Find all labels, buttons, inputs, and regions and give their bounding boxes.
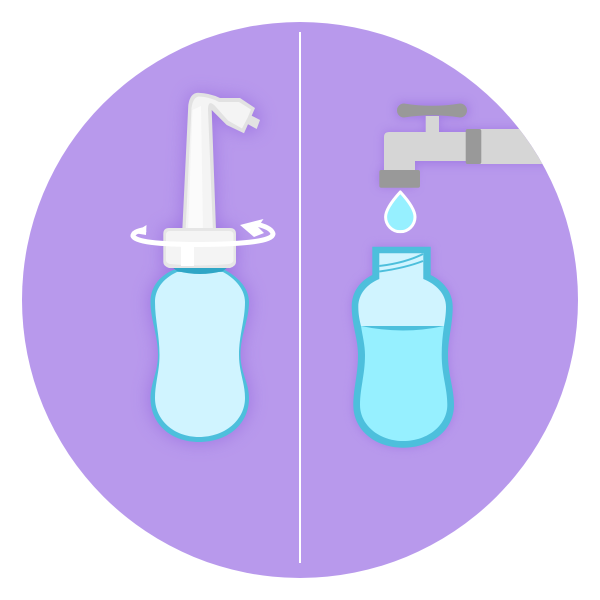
right arrow head (240, 219, 264, 237)
bottle interior (155, 272, 245, 437)
nozzle spout (182, 93, 260, 230)
nozzle cap (163, 228, 236, 268)
water surface (361, 326, 444, 330)
bottle shadow (352, 247, 454, 448)
spout highlight (186, 96, 251, 232)
water (360, 326, 447, 441)
water-filled bottle (352, 247, 454, 448)
faucet shadow (379, 103, 560, 187)
faucet collar (466, 129, 481, 164)
cap face (166, 231, 234, 266)
bottle neck shadow (172, 267, 228, 274)
nozzle bottle (133, 93, 273, 442)
bottle air space (358, 253, 446, 326)
faucet handle (397, 104, 467, 118)
left arrow head (134, 225, 146, 235)
bottle outline (352, 247, 454, 448)
cap highlight (181, 243, 194, 266)
faucet (376, 100, 544, 190)
faucet stem (426, 116, 439, 133)
rotation ring (133, 224, 273, 244)
faucet nozzle nut (379, 170, 420, 188)
rotation arrow (133, 219, 273, 244)
faucet body (384, 132, 468, 171)
spout white streak (188, 106, 203, 232)
water drop (386, 192, 415, 232)
shadow: nozzle bottle (150, 93, 260, 442)
divider line (299, 32, 301, 563)
faucet pipe (480, 129, 542, 164)
bottle neck threads (379, 254, 423, 272)
bottle body (150, 270, 249, 442)
